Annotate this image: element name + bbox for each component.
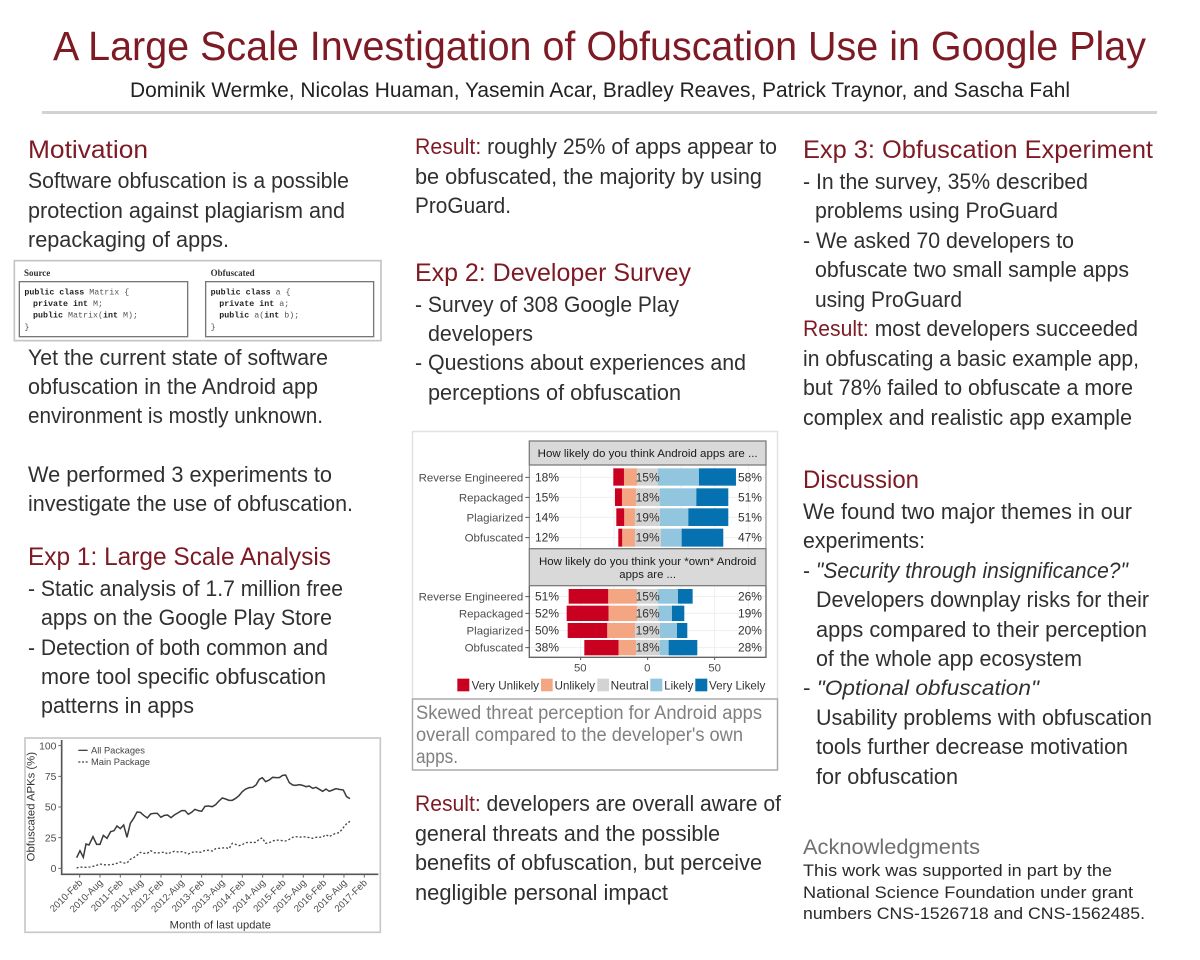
- x axis labels: 2015-Aug: [271, 878, 309, 915]
- x axis labels: 2012-Feb: [129, 878, 166, 915]
- y axis labels: 0: [51, 864, 57, 875]
- authors: Dominik Wermke, Nicolas Huaman, Yasemin Acar, Bradley Reaves, Patrick Traynor, and Sascha Fahl: [130, 79, 1070, 102]
- facet: own Android apps: Repackaged: [459, 608, 523, 620]
- facet: own Android apps: 50%: [535, 624, 559, 638]
- text: experiment 3 result: but 78% failed to obfuscate a more: [803, 375, 1133, 400]
- text: experiment 3 result: [803, 316, 1139, 430]
- figure: source vs obfuscated code: }: [211, 322, 216, 332]
- text: state of obfuscation: environment is mostly unknown.: [28, 403, 323, 428]
- figure: source vs obfuscated code: }: [24, 322, 29, 332]
- text: discussion body: of the whole app ecosystem: [816, 646, 1082, 671]
- text: experiment 1 result: be obfuscated, the majority by using: [415, 164, 762, 189]
- x axis labels: 2010-Aug: [68, 878, 105, 915]
- text: discussion body: experiments:: [803, 528, 925, 553]
- line chart: obfuscated APKs over time: [25, 738, 380, 932]
- facet: Android apps overall: 15%: [535, 490, 559, 504]
- legend: Neutral: [611, 679, 649, 692]
- panel: middle column: [412, 134, 782, 905]
- text: experiment 1 bullets: - Detection of both common and: [28, 635, 328, 660]
- facet: Android apps overall: 19%: [636, 531, 660, 545]
- text: experiment 1 bullets: - Static analysis of 1.7 million free: [28, 576, 343, 601]
- facet: Android apps overall: 51%: [738, 490, 762, 504]
- facet: Android apps overall: 58%: [738, 470, 762, 484]
- text: experiment 1 result: Result: roughly 25% of apps appear to: [415, 134, 777, 159]
- facet: Android apps overall: Obfuscated: [465, 533, 523, 545]
- facet: Android apps overall: 18%: [535, 470, 559, 484]
- axis tick labels: [574, 662, 721, 674]
- facet: Android apps overall: Repackaged: [459, 492, 523, 504]
- facet: own Android apps: 15%: [636, 590, 660, 604]
- facet: own Android apps: Obfuscated: [465, 643, 523, 655]
- text: acknowledgments: This work was supported in part by the: [803, 862, 1112, 880]
- text: discussion body: for obfuscation: [816, 764, 958, 789]
- y axis labels: [39, 741, 57, 875]
- heading: experiment 1: Exp 1: Large Scale Analysis: [28, 543, 331, 571]
- figure: source vs obfuscated code: a(int b);: [254, 311, 299, 321]
- text: experiment 2 result: benefits of obfuscation, but perceive: [415, 850, 762, 875]
- title: A Large Scale Investigation of Obfuscation Use in Google Play: [53, 23, 1146, 69]
- caption: skewed threat perception: Skewed threat perception for Android apps: [416, 703, 762, 724]
- figure: source vs obfuscated code: public class Matrix {: [24, 287, 129, 297]
- text: state of obfuscation: We performed 3 experiments to: [28, 462, 332, 487]
- text: experiment 2 bullets: - Survey of 308 Google Play: [415, 292, 679, 317]
- text: experiment 1 bullets: more tool specific obfuscation: [41, 664, 326, 689]
- x axis labels: 2016-Feb: [292, 878, 329, 915]
- facet: own Android apps: 19%: [738, 606, 762, 620]
- x axis labels: 2013-Feb: [170, 878, 207, 915]
- text: experiment 3 bullets: - In the survey, 35% described: [803, 169, 1088, 194]
- facet: Android apps overall: 14%: [535, 510, 559, 524]
- legend: Main Package: [91, 757, 150, 767]
- x axis labels: 2015-Feb: [251, 878, 288, 915]
- text: discussion body: - "Optional obfuscation": [803, 677, 1041, 700]
- figure: source vs obfuscated code: private int: [219, 299, 274, 309]
- x axis labels: [48, 878, 370, 915]
- x axis labels: 2014-Aug: [231, 878, 268, 915]
- legend: Likely: [664, 679, 693, 692]
- axis tick labels: 0: [644, 662, 650, 674]
- figure: source vs obfuscated code: public class a {: [211, 287, 291, 297]
- x axis labels: 2011-Feb: [89, 878, 126, 914]
- bars: row obfuscated: [618, 529, 723, 547]
- text: experiment 1 bullets: [28, 576, 343, 718]
- facet: own Android apps: apps are ...: [619, 569, 676, 581]
- text: discussion body: tools further decrease motivation: [816, 734, 1128, 759]
- heading: experiment 3: Exp 3: Obfuscation Experiment: [803, 136, 1153, 164]
- caption: skewed threat perception: apps.: [416, 747, 458, 768]
- bars: row plagiarized: [616, 508, 728, 526]
- figure: source vs obfuscated code: Matrix(int M);: [68, 311, 138, 321]
- legend: [457, 679, 765, 692]
- legend: Unlikely: [555, 679, 595, 692]
- bars: row reverse engineered: [613, 468, 736, 486]
- text: experiment 2 result: negligible personal impact: [415, 880, 668, 905]
- heading: motivation: Motivation: [28, 136, 148, 164]
- text: experiment 3 bullets: obfuscate two small sample apps: [815, 257, 1129, 282]
- facet: Android apps overall: 15%: [636, 470, 660, 484]
- panel: right column: [803, 136, 1153, 923]
- facet: own Android apps: Reverse Engineered: [419, 592, 523, 604]
- series: all packages: [77, 775, 350, 858]
- text: discussion body: Developers downplay risks for their: [816, 587, 1149, 612]
- y axis labels: 50: [45, 803, 57, 814]
- text: motivation body: Software obfuscation is a possible: [28, 168, 349, 193]
- x axis labels: 2014-Feb: [211, 878, 248, 915]
- x axis labels: 2012-Aug: [149, 878, 187, 915]
- facet: own Android apps: 52%: [535, 606, 559, 620]
- text: motivation body: protection against plagiarism and: [28, 198, 345, 223]
- facet: own Android apps: Plagiarized: [466, 626, 523, 638]
- caption: skewed threat perception: overall compared to the developer's own: [416, 725, 743, 746]
- text: experiment 3 result: Result: most developers succeeded: [803, 316, 1138, 341]
- text: experiment 2 result: Result: developers are overall aware of: [415, 791, 782, 816]
- text: acknowledgments: [803, 836, 1145, 923]
- facet: own Android apps: [419, 549, 766, 692]
- y axis title: Obfuscated APKs (%): [25, 752, 37, 861]
- x axis labels: 2016-Aug: [312, 878, 349, 915]
- text: experiment 1 bullets: patterns in apps: [41, 693, 194, 718]
- facet: Android apps overall: 12%: [535, 531, 559, 545]
- facet: Android apps overall: Reverse Engineered: [419, 472, 523, 484]
- text: experiment 2 bullets: developers: [428, 321, 533, 346]
- text: experiment 1 result: ProGuard.: [415, 193, 511, 218]
- facet: own Android apps: 18%: [636, 641, 660, 655]
- text: discussion body: apps compared to their perception: [816, 617, 1147, 642]
- text: experiment 3 result: complex and realistic app example: [803, 405, 1132, 430]
- y axis labels: 75: [45, 772, 57, 783]
- caption: skewed threat perception: [412, 699, 778, 770]
- figure: source vs obfuscated code: private int: [33, 299, 88, 309]
- text: experiment 1 result: [415, 134, 777, 218]
- x axis labels: 2013-Aug: [190, 878, 227, 915]
- y axis labels: 100: [39, 741, 57, 752]
- facet: Android apps overall: 18%: [636, 490, 660, 504]
- text: experiment 1 bullets: apps on the Google Play Store: [41, 605, 332, 630]
- text: discussion body: Usability problems with obfuscation: [816, 705, 1152, 730]
- figure: source vs obfuscated code: public: [219, 311, 249, 321]
- axis tick labels: 50: [574, 662, 587, 674]
- bars: row plagiarized: [568, 623, 687, 638]
- text: acknowledgments: Acknowledgments: [803, 836, 980, 859]
- text: experiment 2 result: general threats and the possible: [415, 821, 720, 846]
- text: experiment 2 bullets: [415, 292, 746, 405]
- figure: likert survey chart: [412, 432, 778, 700]
- text: state of obfuscation: obfuscation in the Android app: [28, 374, 318, 399]
- figure: source vs obfuscated code: a;: [279, 299, 289, 309]
- text: experiment 2 bullets: perceptions of obfuscation: [428, 380, 681, 405]
- bars: row reverse engineered: [569, 589, 693, 604]
- bars: row repackaged: [567, 606, 684, 621]
- panel: left column: [14, 136, 381, 932]
- facet: Android apps overall: 47%: [738, 531, 762, 545]
- figure: source vs obfuscated code: public: [33, 311, 63, 321]
- facet: Android apps overall: How likely do you think Android apps are ...: [538, 448, 758, 460]
- x axis labels: 2011-Aug: [109, 878, 146, 915]
- facet: Android apps overall: Plagiarized: [466, 512, 523, 524]
- facet: own Android apps: 26%: [738, 590, 762, 604]
- text: experiment 2 result: [415, 791, 782, 905]
- text: acknowledgments: National Science Foundation under grant: [803, 884, 1133, 902]
- text: discussion body: [803, 499, 1152, 789]
- text: experiment 3 result: in obfuscating a basic example app,: [803, 346, 1139, 371]
- figure: source vs obfuscated code: Source: [24, 268, 50, 278]
- facet: own Android apps: How likely do you think your *own* Android: [539, 556, 756, 568]
- axis tick labels: 50: [708, 662, 721, 674]
- legend: [78, 745, 150, 767]
- figure: source vs obfuscated code: M;: [93, 299, 103, 309]
- facet: own Android apps: 20%: [738, 624, 762, 638]
- facet: own Android apps: 16%: [636, 606, 660, 620]
- text: experiment 3 bullets: problems using ProGuard: [815, 198, 1058, 223]
- facet: Android apps overall: [419, 441, 766, 549]
- x axis title: Month of last update: [170, 920, 271, 932]
- facet: own Android apps: 38%: [535, 641, 559, 655]
- facet: own Android apps: 19%: [636, 624, 660, 638]
- text: acknowledgments: numbers CNS-1526718 and CNS-1562485.: [803, 905, 1145, 923]
- text: discussion body: - "Security through insignificance?": [803, 558, 1129, 583]
- figure: source vs obfuscated code: [14, 261, 381, 341]
- facet: Android apps overall: 19%: [636, 510, 660, 524]
- figure: source vs obfuscated code: Obfuscated: [211, 268, 255, 278]
- text: experiment 3 bullets: [803, 169, 1129, 312]
- text: discussion body: We found two major themes in our: [803, 499, 1132, 524]
- bars: row obfuscated: [584, 640, 697, 655]
- facet: own Android apps: 51%: [535, 590, 559, 604]
- bars: row repackaged: [615, 488, 728, 506]
- legend: All Packages: [91, 745, 145, 755]
- heading: discussion: Discussion: [803, 466, 919, 494]
- text: motivation body: repackaging of apps.: [28, 227, 229, 252]
- text: experiment 3 bullets: using ProGuard: [815, 287, 962, 312]
- text: motivation body: [28, 168, 349, 252]
- text: state of obfuscation: [28, 345, 353, 516]
- text: experiment 3 bullets: - We asked 70 developers to: [803, 228, 1074, 253]
- text: state of obfuscation: investigate the use of obfuscation.: [28, 491, 353, 516]
- x axis labels: 2017-Feb: [333, 878, 370, 915]
- y axis labels: 25: [45, 833, 57, 844]
- legend: Very Unlikely: [472, 679, 539, 692]
- facet: own Android apps: 28%: [738, 641, 762, 655]
- facet: Android apps overall: 51%: [738, 510, 762, 524]
- text: experiment 2 bullets: - Questions about experiences and: [415, 350, 746, 375]
- heading: experiment 2: Exp 2: Developer Survey: [415, 259, 691, 287]
- legend: Very Likely: [709, 679, 765, 692]
- series: main package: [77, 821, 350, 868]
- text: state of obfuscation: Yet the current state of software: [28, 345, 328, 370]
- x axis labels: 2010-Feb: [48, 878, 85, 915]
